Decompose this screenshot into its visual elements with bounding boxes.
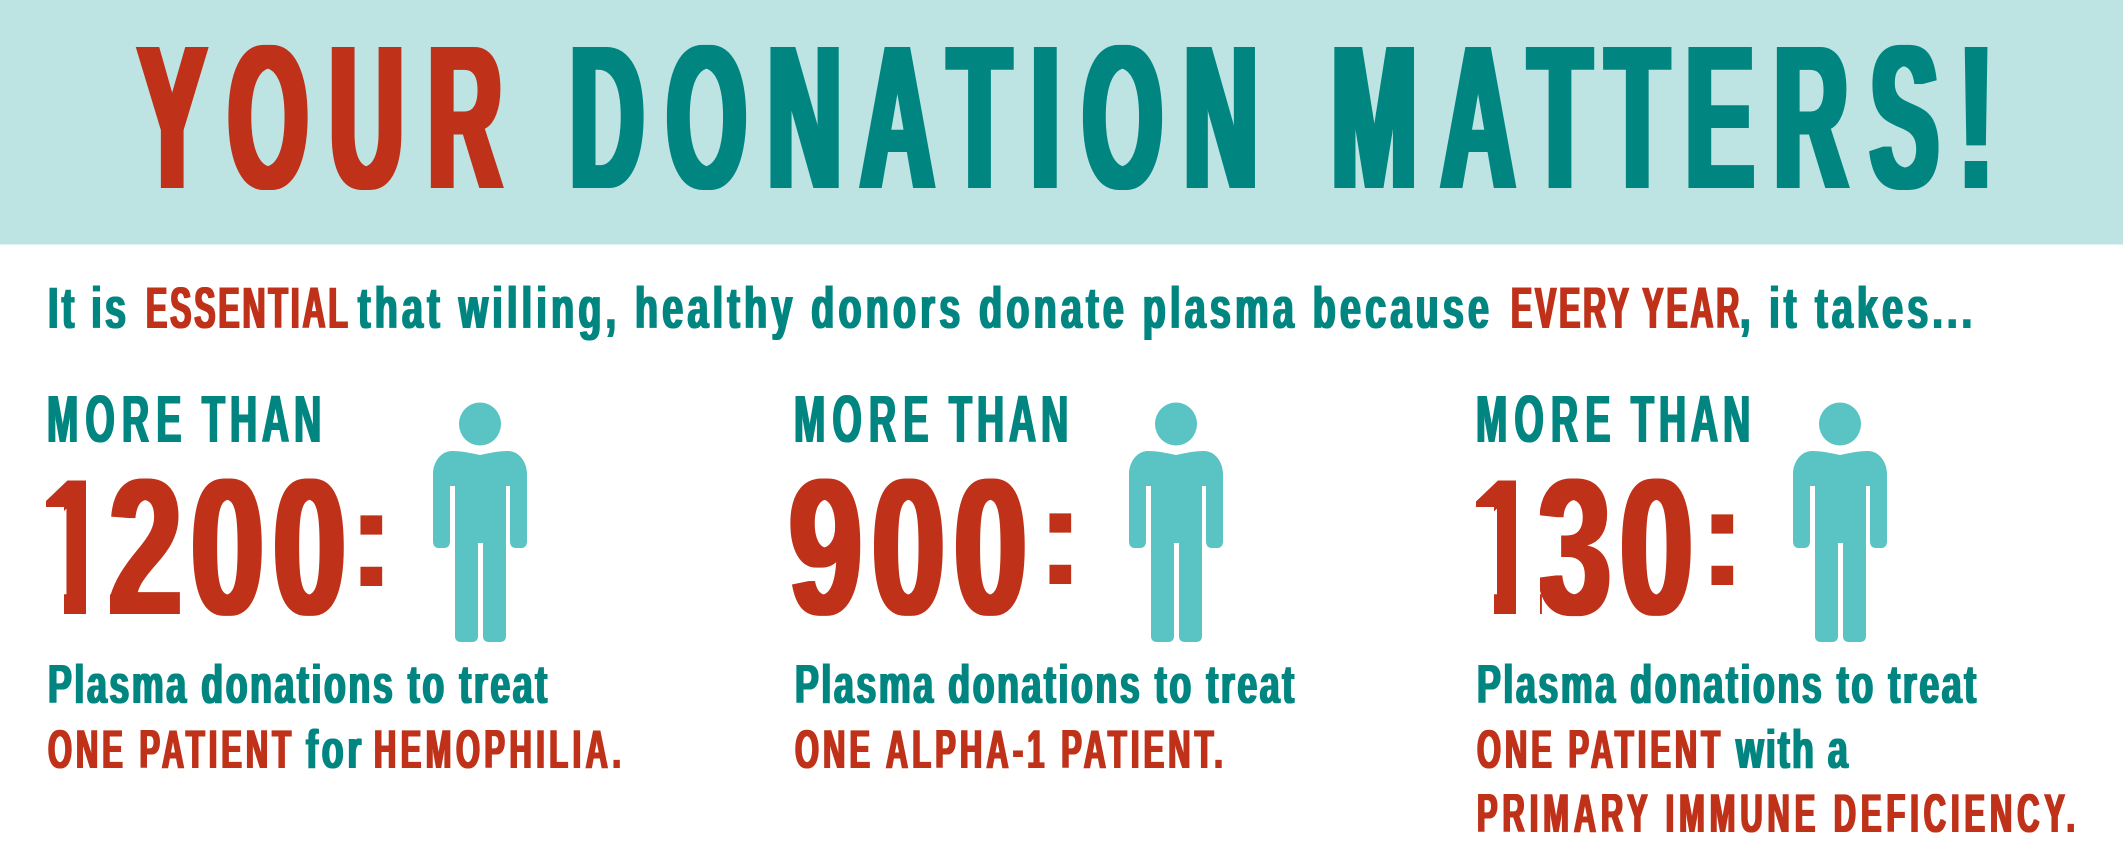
icon: person	[1129, 402, 1223, 642]
title: YOUR	[138, 3, 502, 232]
intro sentence: , it takes...	[1740, 277, 1972, 341]
description	[48, 653, 621, 780]
description	[1477, 653, 2075, 844]
more than label: THAN	[949, 382, 1068, 457]
description: HEMOPHILIA.	[374, 720, 621, 780]
description: for	[306, 718, 361, 780]
number: 130: :	[1699, 458, 1746, 615]
description: ONE PATIENT	[1477, 720, 1720, 780]
title: MATTERS!	[1332, 3, 1993, 232]
more than label	[1476, 382, 1750, 457]
description: Plasma donations to treat	[795, 653, 1294, 715]
number: 900: :	[1037, 457, 1084, 614]
description: with a	[1735, 718, 1849, 780]
icon: person	[1793, 402, 1887, 642]
number: 900: 900	[789, 440, 1027, 656]
panel: alpha-1	[789, 382, 1294, 780]
description: Plasma donations to treat	[48, 653, 547, 715]
number: 1200: 1200	[39, 440, 346, 656]
more than label: THAN	[1631, 382, 1750, 457]
number: 1200	[46, 478, 382, 616]
more than label: MORE	[1476, 382, 1610, 457]
title band	[0, 0, 2123, 244]
intro sentence	[48, 276, 1972, 341]
description: ONE ALPHA-1 PATIENT.	[795, 720, 1223, 780]
intro sentence: that willing, healthy donors donate plasma because	[358, 277, 1489, 341]
description: Plasma donations to treat	[1477, 653, 1976, 715]
description: ONE PATIENT	[48, 720, 291, 780]
more than label: MORE	[47, 382, 181, 457]
number: 130	[1476, 478, 1734, 616]
title: DONATION	[570, 3, 1258, 232]
panel: primary immune deficiency	[1469, 382, 2075, 844]
more than label	[794, 382, 1068, 457]
description	[795, 653, 1294, 780]
more than label: THAN	[202, 382, 321, 457]
more than label: MORE	[794, 382, 928, 457]
number: 1200: :	[348, 459, 395, 616]
panel: hemophilia	[39, 382, 621, 780]
title	[138, 3, 1993, 232]
description: PRIMARY IMMUNE DEFICIENCY.	[1477, 784, 2075, 844]
intro sentence: ESSENTIAL	[146, 276, 348, 340]
intro sentence: It is	[48, 277, 126, 341]
number: 130: 130	[1469, 440, 1693, 656]
icon: person	[433, 402, 527, 642]
intro sentence: EVERY YEAR	[1511, 276, 1739, 340]
more than label	[47, 382, 321, 457]
